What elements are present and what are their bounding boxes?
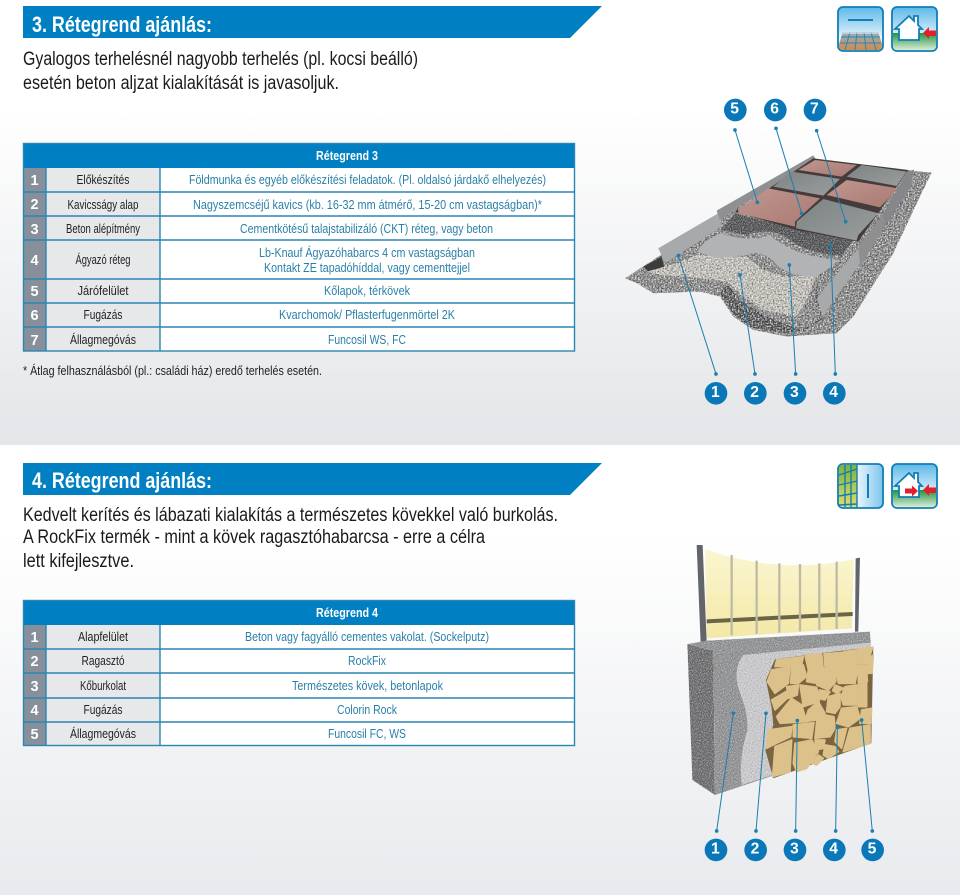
dark excavation shadow bbox=[643, 257, 665, 272]
row 3: Cementkötésű talajstabilizáló (CKT) réteg, vagy beton bbox=[240, 221, 493, 236]
number badges: 4 bbox=[829, 384, 838, 401]
row 4: 4 bbox=[30, 253, 39, 269]
row 4: Ágyazó réteg bbox=[76, 252, 130, 267]
row 4: Kontakt ZE tapadóhíddal, vagy cementtejjel bbox=[264, 260, 470, 275]
text block: section 4 intro bbox=[23, 505, 558, 572]
row 2 bbox=[30, 653, 386, 670]
heading: section 4 banner bbox=[23, 463, 602, 495]
row 6: 6 bbox=[30, 308, 39, 324]
row 5: Funcosil FC, WS bbox=[328, 726, 406, 741]
row 3: 3 bbox=[30, 679, 39, 695]
number badges: 2 bbox=[751, 841, 760, 858]
number badges: 1 bbox=[711, 841, 720, 858]
ground base bbox=[625, 160, 932, 337]
row 4: Lb-Knauf Ágyazóhabarcs 4 cm vastagságban bbox=[259, 245, 475, 260]
row 6: Fugázás bbox=[84, 307, 123, 322]
text block: section 4 intro: Kedvelt kerítés és lábazati kialakítás a természetes kövekkel való burkolás. bbox=[23, 505, 558, 526]
row 7: Funcosil WS, FC bbox=[328, 332, 406, 347]
row 4: Fugázás bbox=[84, 702, 123, 717]
row 2: Ragasztó bbox=[82, 653, 124, 668]
row 4: Colorin Rock bbox=[337, 702, 397, 717]
left curb bbox=[658, 213, 722, 263]
row 6 bbox=[30, 307, 455, 324]
paving stones bbox=[735, 158, 908, 242]
stone cladding bbox=[765, 647, 873, 778]
row 4 bbox=[30, 702, 397, 719]
icon: wall mesh bbox=[838, 464, 883, 508]
row 1: 1 bbox=[30, 173, 39, 189]
row 3: Beton alépítmény bbox=[66, 221, 140, 236]
text block: section 3 intro: Gyalogos terhelésnél nagyobb terhelés (pl. kocsi beálló) bbox=[23, 49, 418, 70]
row 4: 4 bbox=[30, 703, 39, 719]
row 2: 2 bbox=[30, 654, 39, 670]
row 4 bbox=[30, 245, 475, 275]
heading: section 3 banner bbox=[23, 6, 602, 38]
row 7 bbox=[30, 332, 406, 349]
number badges: 2 bbox=[750, 384, 759, 401]
cement layer bbox=[697, 233, 840, 277]
text block: section 3 intro bbox=[23, 49, 418, 94]
row 5: Állagmegóvás bbox=[70, 726, 136, 741]
row 2: Nagyszemcséjű kavics (kb. 16-32 mm átmérő, 15-20 cm vastagságban)* bbox=[193, 197, 542, 212]
row 1 bbox=[30, 629, 489, 646]
number badges: 7 bbox=[810, 101, 819, 118]
row 5: Járófelület bbox=[78, 283, 129, 298]
table header: Rétegrend 3 bbox=[316, 149, 378, 163]
leader lines bbox=[715, 712, 874, 832]
number badges: 4 bbox=[829, 841, 838, 858]
number badges bbox=[705, 99, 846, 405]
row 5 bbox=[30, 283, 410, 300]
text block: section 4 intro: A RockFix termék - mint a kövek ragasztóhabarcsa - erre a célra bbox=[23, 527, 485, 548]
illustration: pavement cross-section bbox=[625, 99, 932, 405]
row 1 bbox=[30, 172, 546, 189]
leader lines bbox=[677, 127, 847, 375]
adhesive layer bbox=[737, 643, 871, 785]
number badges: 5 bbox=[868, 841, 877, 858]
text block: section 3 intro: esetén beton aljzat kialakítását is javasoljuk. bbox=[23, 73, 339, 94]
illustration: fence wall cross-section bbox=[687, 545, 884, 861]
row 6: Kvarchomok/ Pflasterfugenmörtel 2K bbox=[279, 307, 455, 322]
panel: section 4 background bbox=[0, 445, 960, 895]
mortar layer bbox=[720, 213, 853, 256]
icon: house outdoor with arrow bbox=[892, 7, 937, 51]
footnote: * Átlag felhasználásból (pl.: családi ház) eredő terhelés esetén. bbox=[23, 363, 322, 378]
row 1: Földmunka és egyéb előkészítési feladatok. (Pl. oldalsó járdakő elhelyezés) bbox=[189, 172, 546, 187]
row 1: 1 bbox=[30, 630, 39, 646]
heading: section 4 banner: 4. Rétegrend ajánlás: bbox=[32, 468, 212, 493]
right curb bbox=[858, 213, 885, 267]
row 7: Állagmegóvás bbox=[70, 332, 136, 347]
row 1: Előkészítés bbox=[76, 172, 130, 187]
row 1: Alapfelület bbox=[78, 629, 128, 644]
row 5: 5 bbox=[30, 727, 39, 743]
row 5 bbox=[30, 726, 406, 743]
icon: paving surface bbox=[838, 7, 883, 51]
row 2: 2 bbox=[30, 197, 39, 213]
row 2: RockFix bbox=[348, 653, 386, 668]
row 7: 7 bbox=[30, 333, 39, 349]
gravel layer bbox=[647, 255, 817, 317]
number badges bbox=[705, 839, 884, 861]
number badges: 3 bbox=[790, 841, 799, 858]
panel: section 3 background bbox=[0, 0, 960, 445]
table header: Rétegrend 4 bbox=[316, 606, 378, 620]
row 3: Kőburkolat bbox=[80, 678, 126, 693]
row 5: 5 bbox=[30, 284, 39, 300]
number badges: 5 bbox=[730, 101, 739, 118]
icon: house with two arrows bbox=[892, 464, 937, 508]
number badges: 1 bbox=[711, 384, 720, 401]
table: Rétegrend 4 bbox=[23, 600, 575, 746]
row 1: Beton vagy fagyálló cementes vakolat. (Sockelputz) bbox=[245, 629, 489, 644]
table: Rétegrend 3 bbox=[23, 143, 575, 351]
row 5: Kőlapok, térkövek bbox=[324, 283, 410, 298]
row 3 bbox=[30, 678, 443, 695]
row 2 bbox=[30, 197, 542, 213]
number badges: 6 bbox=[770, 101, 779, 118]
fence panels bbox=[697, 545, 860, 643]
row 2: Kavicsságy alap bbox=[68, 197, 138, 212]
row 3: Természetes kövek, betonlapok bbox=[292, 678, 443, 693]
wall body bbox=[687, 632, 871, 795]
text block: section 4 intro: lett kifejlesztve. bbox=[23, 551, 134, 572]
heading: section 3 banner: 3. Rétegrend ajánlás: bbox=[32, 12, 212, 37]
row 3 bbox=[30, 221, 493, 238]
number badges: 3 bbox=[790, 384, 799, 401]
row 3: 3 bbox=[30, 222, 39, 238]
